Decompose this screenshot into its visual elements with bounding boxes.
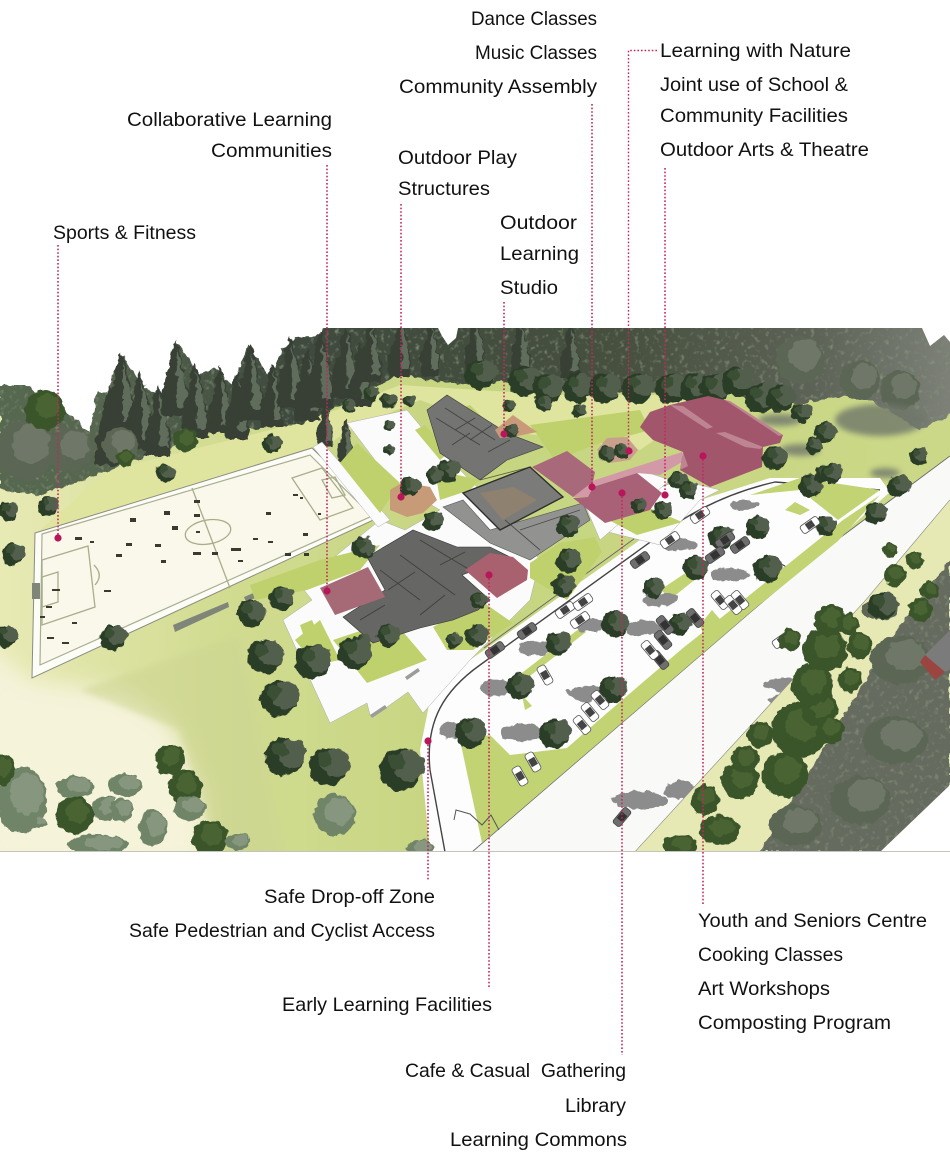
label: outdoor play — [398, 147, 517, 200]
label: collaborative learning: Collaborative Learning — [127, 109, 332, 131]
label: nature and joint use: Joint use of School & — [660, 74, 848, 96]
label: nature and joint use: Community Facilities — [660, 105, 848, 127]
leader: learning with nature — [625, 50, 657, 455]
label: early learning: Early Learning Facilities — [282, 994, 492, 1016]
connector corridor — [573, 452, 682, 497]
label: safe access: Safe Pedestrian and Cyclist Access — [129, 920, 435, 942]
label: cafe, library, commons: Cafe & Casual Gathering — [405, 1060, 626, 1082]
label: youth and seniors: Cooking Classes — [698, 944, 843, 966]
left hillside trees — [0, 390, 197, 480]
aerial bottom edge — [0, 851, 950, 852]
label: outdoor learning studio: Learning — [500, 243, 579, 265]
label: dance, music, assembly — [399, 8, 597, 98]
label: outdoor play: Structures — [398, 178, 490, 200]
road edge lines — [429, 456, 950, 852]
leader lines and markers — [54, 50, 707, 1055]
plaza benches — [370, 668, 420, 718]
parking lot trees — [455, 403, 929, 750]
label: sports: Sports & Fitness — [53, 222, 196, 244]
upper lawn band — [40, 385, 720, 530]
parking and drive area — [420, 478, 890, 852]
play area outdoor circles — [390, 415, 638, 517]
school buildings in grey — [343, 395, 590, 643]
main road — [472, 456, 950, 852]
label: safe access: Safe Drop-off Zone — [264, 886, 435, 908]
youth and seniors centre roofs — [640, 396, 783, 487]
sports field — [32, 448, 382, 678]
label: cafe, library, commons: Learning Commons — [450, 1129, 627, 1151]
leader: sports and fitness — [54, 245, 62, 542]
leader: safe drop-off — [424, 737, 432, 880]
round trees behind the school — [465, 336, 920, 414]
mid-tone lawn wedge — [82, 676, 216, 822]
leader: outdoor arts — [661, 168, 669, 499]
lawns by the school — [250, 405, 682, 683]
label: dance, music, assembly: Community Assembly — [399, 76, 597, 98]
conifers along the tree line — [96, 313, 580, 465]
label: nature and joint use — [660, 40, 869, 161]
label: dance, music, assembly: Music Classes — [475, 42, 597, 64]
pale lawn at lower left — [0, 640, 210, 870]
label: youth and seniors: Art Workshops — [698, 978, 830, 1000]
forest mass — [0, 315, 950, 495]
parking lot tree shadows — [439, 500, 807, 809]
label: youth and seniors — [698, 910, 927, 1034]
leader: youth and seniors centre — [699, 452, 707, 905]
label: cafe, library, commons — [405, 1060, 627, 1151]
programme highlights in translucent pink — [320, 396, 783, 615]
lawn shadow patches upper right — [758, 404, 925, 478]
label: cafe, library, commons: Library — [565, 1095, 626, 1117]
label: nature and joint use: Outdoor Arts & Theatre — [660, 139, 869, 161]
parked cars — [484, 506, 821, 828]
label: outdoor learning studio: Studio — [500, 277, 558, 299]
plaza and paths around the school — [283, 410, 720, 723]
sky behind the tree line — [0, 328, 324, 432]
field markings — [42, 468, 353, 625]
west classrooms — [343, 530, 510, 643]
collaborative learning block — [320, 567, 385, 615]
roadside green strip and wedge — [460, 495, 880, 843]
label: youth and seniors: Youth and Seniors Centre — [698, 910, 927, 932]
leader: cafe and library — [618, 489, 626, 1055]
sky gaps at the top of the forest — [438, 328, 950, 346]
north wing — [427, 395, 543, 480]
label: collaborative learning — [127, 109, 332, 162]
label: safe access — [129, 886, 435, 942]
label: collaborative learning: Communities — [211, 140, 332, 162]
label: outdoor play: Outdoor Play — [398, 147, 517, 169]
building detail lines — [360, 408, 580, 620]
label: youth and seniors: Composting Program — [698, 1012, 891, 1034]
lower left trees — [0, 745, 433, 857]
community assembly block — [532, 451, 595, 497]
leader: early learning — [485, 571, 493, 988]
leader: outdoor play — [397, 204, 405, 501]
aerial site rendering — [0, 313, 950, 870]
field goals and bleachers — [32, 583, 254, 632]
street lamp — [454, 810, 499, 830]
lower right forest — [635, 500, 950, 856]
building-side and plaza trees — [99, 420, 699, 651]
neighbouring house roof — [925, 630, 950, 675]
leader: collaborative learning — [323, 165, 331, 595]
label: outdoor learning studio: Outdoor — [500, 212, 578, 234]
label: dance, music, assembly: Dance Classes — [471, 8, 597, 30]
small lawn trees — [0, 387, 587, 647]
lawn base — [0, 328, 950, 852]
cafe and library block — [573, 473, 662, 523]
label: outdoor learning studio — [500, 212, 579, 299]
central gymnasium — [443, 500, 590, 560]
leader: community assembly — [588, 104, 596, 491]
players — [40, 494, 321, 644]
early learning block — [465, 553, 528, 598]
leader: outdoor learning studio — [500, 302, 508, 438]
lawn trees near the school — [248, 638, 425, 836]
parking median strips — [505, 478, 880, 710]
label: nature and joint use: Learning with Nature — [660, 40, 851, 62]
